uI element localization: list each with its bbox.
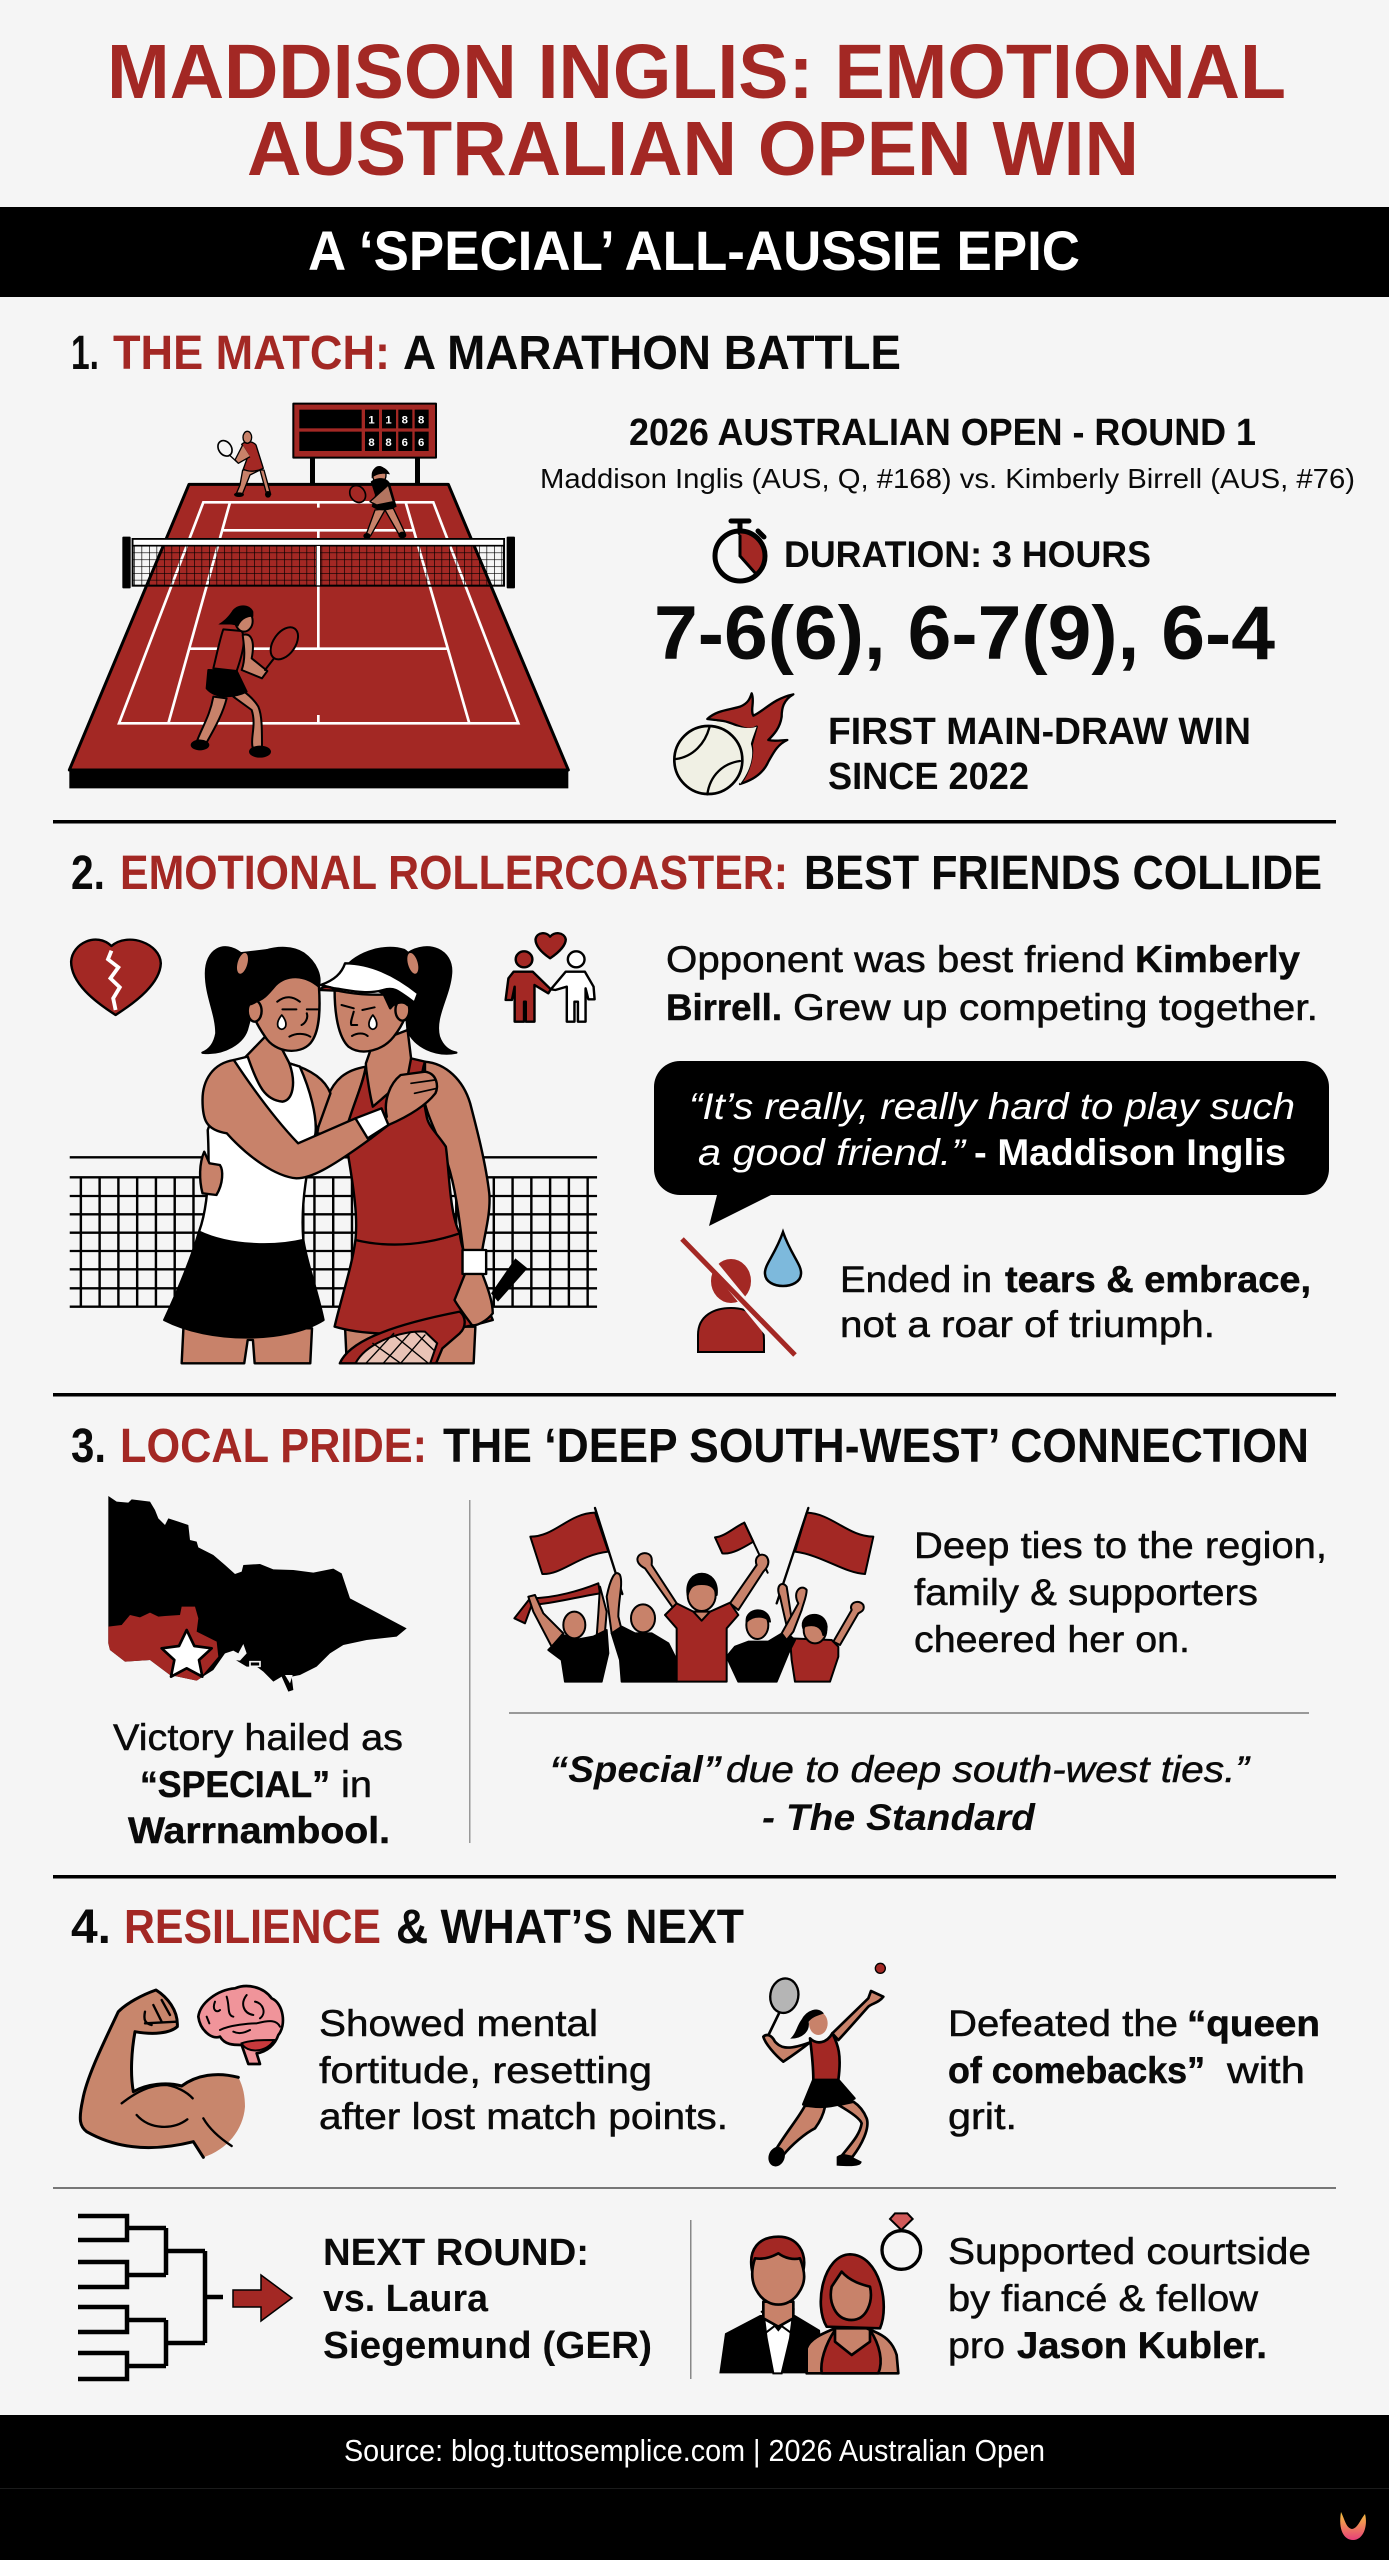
panel: section 4 resilience	[53, 1901, 1336, 2379]
panel: section 2 emotional rollercoaster	[70, 847, 1329, 1363]
heading: the match: A MARATHON BATTLE	[403, 327, 901, 380]
mental fortitude text: Showed mental	[319, 2003, 598, 2044]
mental fortitude text	[319, 2003, 728, 2137]
deep ties text: family & supporters	[914, 1572, 1258, 1613]
icon: crossed-out roar with teardrop	[682, 1232, 801, 1355]
heading: emotional rollercoaster: EMOTIONAL ROLLERCOASTER:	[120, 847, 788, 900]
quote: the standard: - The Standard	[762, 1797, 1036, 1838]
heading: the match: THE MATCH:	[113, 327, 390, 380]
scoreboard: 8	[385, 437, 392, 449]
icon: two friends holding hands	[506, 933, 595, 1022]
victory text: “SPECIAL”	[140, 1764, 330, 1805]
title: MADDISON INGLIS: EMOTIONAL	[107, 29, 1286, 115]
match title text: 2026 AUSTRALIAN OPEN - ROUND 1	[629, 412, 1256, 454]
callout: quote speech bubble: “It’s really, really hard to play such	[689, 1086, 1295, 1127]
queen of comebacks text: “queen	[1187, 2003, 1320, 2044]
map: Victoria with south-west highlighted	[108, 1496, 407, 1692]
heading: local pride	[71, 1420, 1309, 1473]
scoreboard: 1	[385, 415, 392, 427]
illustration: two friends embracing at the net	[70, 933, 597, 1363]
scoreboard: 8	[368, 437, 375, 449]
ended in tears text: Ended in	[840, 1259, 992, 1300]
victory text	[113, 1717, 403, 1851]
scoreboard: 8	[418, 415, 424, 427]
icon: watermark logo	[1340, 2512, 1366, 2540]
next round text: Siegemund (GER)	[323, 2325, 652, 2367]
supported courtside text: pro	[948, 2325, 1005, 2366]
victory text: Victory hailed as	[113, 1717, 403, 1758]
near player	[191, 605, 304, 758]
title: AUSTRALIAN OPEN WIN	[247, 106, 1139, 192]
deep ties text: cheered her on.	[914, 1619, 1190, 1660]
illustration: cheering crowd with flags	[514, 1508, 873, 1682]
panel: section 3 local pride	[71, 1420, 1327, 1851]
callout: quote speech bubble: a good friend.”	[698, 1132, 967, 1173]
panel: section 1 the match	[69, 327, 1355, 798]
fan far right	[778, 1584, 864, 1682]
next round text: vs. Laura	[323, 2278, 489, 2320]
heading: local pride: THE ‘DEEP SOUTH-WEST’ CONNECTION	[443, 1420, 1309, 1473]
ended in tears text: not a roar of triumph.	[840, 1304, 1215, 1345]
icon: flaming tennis ball	[674, 693, 793, 794]
tennis net	[122, 537, 515, 588]
match title text	[540, 412, 1355, 494]
title	[107, 29, 1286, 192]
heading: resilience: 4.	[71, 1901, 111, 1954]
flags	[514, 1508, 873, 1623]
fan second	[607, 1573, 677, 1682]
footer	[0, 2415, 1389, 2560]
first win text: FIRST MAIN-DRAW WIN	[828, 711, 1251, 753]
score: 7-6(6), 6-7(9), 6-4	[654, 591, 1275, 676]
queen of comebacks text: Defeated the	[948, 2003, 1178, 2044]
scoreboard: 1	[368, 415, 375, 427]
far player in black	[346, 467, 406, 539]
net behind players	[70, 1157, 597, 1307]
central fan	[637, 1553, 768, 1682]
illustration: tennis court with players and scoreboard	[69, 404, 568, 788]
scoreboard	[293, 404, 436, 485]
scoreboard: 6	[418, 437, 424, 449]
best friend text	[666, 939, 1318, 1028]
first win text: SINCE 2022	[828, 756, 1029, 798]
victory text: in	[341, 1764, 372, 1805]
icon: stopwatch	[715, 521, 765, 581]
heading: emotional rollercoaster: 2.	[71, 847, 105, 900]
icon: flexed arm and brain	[80, 1986, 283, 2157]
subtitle banner: A ‘SPECIAL’ ALL-AUSSIE EPIC	[308, 219, 1080, 282]
heading: local pride: 3.	[71, 1420, 106, 1473]
heading: emotional rollercoaster	[71, 847, 1322, 900]
best friend text: Grew up competing together.	[793, 987, 1318, 1028]
match title text: Maddison Inglis (AUS, Q, #168) vs. Kimberly Birrell (AUS, #76)	[540, 463, 1355, 494]
heading: local pride: LOCAL PRIDE:	[120, 1420, 427, 1473]
court surface	[69, 484, 568, 788]
left friend in white	[164, 947, 437, 1363]
callout: quote speech bubble: - Maddison Inglis	[974, 1132, 1286, 1173]
best friend text: Opponent was best friend	[666, 939, 1125, 980]
ended in tears text	[840, 1259, 1311, 1345]
first win text	[828, 711, 1251, 798]
arrow: to next round	[233, 2275, 292, 2321]
quote: the standard	[549, 1749, 1251, 1838]
queen of comebacks text: with	[1226, 2050, 1305, 2091]
heading: the match: 1.	[71, 327, 99, 380]
heading: resilience	[71, 1901, 744, 1954]
callout: quote speech bubble	[654, 1061, 1329, 1226]
fan fourth	[727, 1588, 807, 1682]
heading: resilience: RESILIENCE	[124, 1901, 381, 1954]
ended in tears text: tears & embrace,	[1005, 1259, 1311, 1300]
best friend text: Birrell.	[666, 987, 782, 1028]
fan far left	[528, 1587, 608, 1682]
icon: broken heart	[71, 940, 161, 1015]
victory text: Warrnambool.	[128, 1810, 390, 1851]
far player in red	[215, 431, 271, 498]
queen of comebacks text: grit.	[948, 2096, 1017, 2137]
supported courtside text: Supported courtside	[948, 2231, 1311, 2272]
right friend in red	[317, 947, 528, 1363]
footer: Source: blog.tuttosemplice.com | 2026 Australian Open	[344, 2433, 1045, 2468]
quote: the standard: “Special”	[549, 1749, 723, 1790]
scoreboard: 6	[402, 437, 408, 449]
supported courtside text: Jason Kubler.	[1017, 2325, 1267, 2366]
supported courtside text	[948, 2231, 1311, 2366]
next round text	[323, 2232, 652, 2367]
mental fortitude text: fortitude, resetting	[319, 2050, 652, 2091]
mental fortitude text: after lost match points.	[319, 2096, 728, 2137]
deep ties text: Deep ties to the region,	[914, 1525, 1327, 1566]
heading: emotional rollercoaster: BEST FRIENDS COLLIDE	[804, 847, 1322, 900]
supported courtside text: by fiancé & fellow	[948, 2278, 1258, 2319]
deep ties text	[914, 1525, 1327, 1660]
heading: resilience: & WHAT’S NEXT	[396, 1901, 744, 1954]
subtitle banner	[0, 207, 1389, 297]
icon: couple with engagement ring	[719, 2213, 921, 2373]
next round text: NEXT ROUND:	[323, 2232, 589, 2274]
queen of comebacks text: of comebacks”	[948, 2050, 1205, 2091]
queen of comebacks text	[948, 2003, 1320, 2137]
duration text: DURATION: 3 HOURS	[784, 534, 1151, 575]
icon: tournament bracket	[78, 2216, 223, 2379]
heading: the match	[71, 327, 901, 380]
quote: the standard: due to deep south-west ties.”	[726, 1749, 1251, 1790]
icon: tennis player serving	[763, 1963, 885, 2169]
scoreboard: 8	[402, 415, 408, 427]
best friend text: Kimberly	[1135, 939, 1300, 980]
